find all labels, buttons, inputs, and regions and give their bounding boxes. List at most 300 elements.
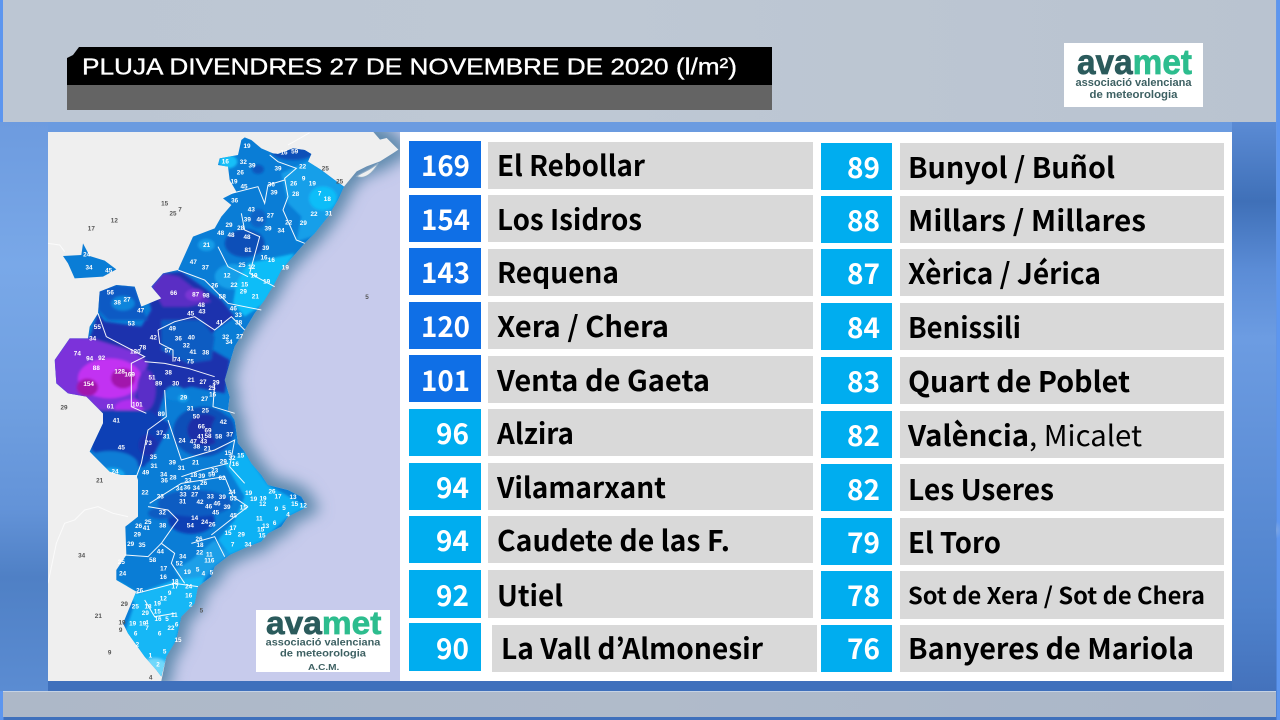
logo: avamet header: de meteorologia xyxy=(1090,89,1178,101)
map station values: 45 xyxy=(240,184,248,191)
map station values: 48 xyxy=(227,232,235,239)
map station values: 43 xyxy=(248,206,255,213)
map station values: 58 xyxy=(149,557,157,564)
map station values: 19 xyxy=(282,264,289,271)
map station values: 29 xyxy=(212,380,220,387)
map station values: 34 xyxy=(193,485,200,492)
map station values: 73 xyxy=(145,440,152,447)
map station values: 59 xyxy=(291,149,299,156)
map station values: 169 xyxy=(124,372,135,379)
map station values: 27 xyxy=(236,334,244,341)
map station values: 16 xyxy=(185,592,193,599)
row: 89 Bunyol / Buñol: Bunyol / Buñol xyxy=(908,146,1115,187)
map station values: 24 xyxy=(178,437,186,444)
map station values: 38 xyxy=(165,370,172,377)
map station values: 116 xyxy=(204,558,215,565)
row: 94 Vilamarxant: Vilamarxant xyxy=(496,466,666,507)
row: 83 Quart de Poblet: Quart de Poblet xyxy=(908,360,1130,401)
row: 87 Xèrica / Jérica xyxy=(821,249,1224,296)
map values outside region: 5 xyxy=(365,294,369,301)
map station values: 37 xyxy=(156,430,164,437)
map station values: 40 xyxy=(188,334,195,341)
map station values: 24 xyxy=(201,519,209,526)
map station values: 39 xyxy=(244,216,251,223)
white content panel xyxy=(48,132,1232,681)
row: 154 Los Isidros: 154 xyxy=(421,198,470,239)
row: 82 València, Micalet: València, Micalet xyxy=(907,414,1142,455)
map station values: 66 xyxy=(170,290,178,297)
row: 82 València, Micalet xyxy=(821,411,1224,458)
map station values: 26 xyxy=(211,282,219,289)
map station values: 19 xyxy=(184,569,191,576)
row: 88 Millars / Millares xyxy=(821,196,1224,243)
row: 120 Xera / Chera: 120 xyxy=(421,305,470,346)
row: 94 Caudete de las F.: 94 xyxy=(436,519,469,560)
map station values: 31 xyxy=(179,498,187,505)
map station values: 29 xyxy=(238,532,245,539)
region rainfall colours xyxy=(54,138,344,676)
map station values: 27 xyxy=(191,492,199,499)
map station values: 12 xyxy=(223,272,231,279)
logo: avamet header: avamet xyxy=(1077,43,1192,82)
row: 90 La Vall d'Almonesir xyxy=(409,623,817,672)
row: 79 El Toro: El Toro xyxy=(908,521,1001,562)
map station values: 32 xyxy=(240,159,247,166)
map station values: 6 xyxy=(134,630,138,637)
map station values: 15 xyxy=(240,504,247,511)
map station values: 11 xyxy=(256,516,263,523)
map station values: 18 xyxy=(190,472,198,479)
map station values: 41 xyxy=(113,418,120,425)
map station values: 26 xyxy=(136,587,144,594)
map station values: 5 xyxy=(210,569,214,576)
map station values: 34 xyxy=(85,264,93,271)
map station values: 46 xyxy=(256,217,264,224)
map station values: 18 xyxy=(171,579,179,586)
map values outside region xyxy=(60,166,369,681)
map station values: 16 xyxy=(154,616,162,623)
map station values: 58 xyxy=(219,293,226,300)
map station values: 98 xyxy=(202,293,210,300)
map station values: 28 xyxy=(292,191,300,198)
map station values: 34 xyxy=(89,335,97,342)
map station values: 7 xyxy=(231,542,235,549)
map station values: 4 xyxy=(286,512,290,519)
map station values: 31 xyxy=(150,463,158,470)
map station values: 48 xyxy=(198,302,205,309)
map station values: 28 xyxy=(169,474,177,481)
map station values: 38 xyxy=(159,522,167,529)
row: 94 Vilamarxant xyxy=(409,463,813,510)
map station values: 24 xyxy=(111,469,119,476)
map station values: 2 xyxy=(156,662,160,669)
map station values: 31 xyxy=(178,465,185,472)
map station values: 18 xyxy=(324,196,331,203)
row: 96 Alzira xyxy=(409,409,813,456)
row: 76 Banyeres de Mariola: Banyeres de Mariola xyxy=(908,627,1194,668)
row: 101 Venta de Gaeta xyxy=(409,355,813,403)
map station values: 45 xyxy=(187,311,195,318)
map station values: 18 xyxy=(144,604,152,611)
map station values: 7 xyxy=(318,191,322,198)
map station values: 47 xyxy=(137,308,145,315)
map station values: 22 xyxy=(167,625,175,632)
map station values: 26 xyxy=(268,488,276,495)
map station values: 25 xyxy=(238,262,246,269)
map station values: 15 xyxy=(257,527,265,534)
map logo: avamet A.C.M.: de meteorologia xyxy=(280,649,366,660)
map station values: 58 xyxy=(215,433,223,440)
map station values: 19 xyxy=(230,178,238,185)
row: 101 Venta de Gaeta: 101 xyxy=(421,359,470,400)
map station values: 34 xyxy=(244,542,252,549)
row: 76 Banyeres de Mariola: 76 xyxy=(847,627,880,668)
row: 84 Benissili xyxy=(821,303,1224,350)
map station values: 45 xyxy=(212,510,220,517)
map station values: 27 xyxy=(123,296,131,303)
map station values: 81 xyxy=(244,247,252,254)
row: 94 Caudete de las F. xyxy=(409,516,813,563)
map station values: 57 xyxy=(164,347,172,354)
map station values: 69 xyxy=(204,428,212,435)
row: 82 València, Micalet: 82 xyxy=(847,414,880,455)
map values outside region: 25 xyxy=(322,166,329,173)
map station values: 16 xyxy=(268,257,275,264)
row: 96 Alzira: 96 xyxy=(436,412,469,453)
map station values: 32 xyxy=(159,509,166,516)
logo: avamet header xyxy=(1064,43,1203,107)
map station values: 27 xyxy=(199,379,207,386)
row: 90 La Vall d'Almonesir: 90 xyxy=(436,627,469,668)
map station values: 47 xyxy=(190,259,197,266)
map station values: 34 xyxy=(179,553,187,560)
map station values: 22 xyxy=(196,549,204,556)
map station values: 17 xyxy=(274,493,282,500)
map station values: 26 xyxy=(237,170,244,177)
row: 88 Millars / Millares: 88 xyxy=(847,199,880,240)
map station values: 4 xyxy=(145,619,149,626)
enclave rainfall area xyxy=(63,243,116,278)
map values outside region: 29 xyxy=(60,404,68,411)
map station values: 21 xyxy=(252,294,259,301)
map station values: 45 xyxy=(230,513,237,520)
map station values: 19 xyxy=(309,180,316,187)
map station values: 43 xyxy=(200,438,208,445)
map station values: 16 xyxy=(222,159,229,166)
map station values: 51 xyxy=(148,374,156,381)
map station values: 19 xyxy=(250,496,258,503)
map station values: 27 xyxy=(267,212,274,219)
map station values: 39 xyxy=(270,190,278,197)
map values outside region: 9 xyxy=(119,627,123,634)
map station values: 41 xyxy=(189,349,197,356)
map station values: 39 xyxy=(264,226,272,233)
map station values: 45 xyxy=(105,267,113,274)
map station values: 21 xyxy=(187,377,195,384)
map station values: 34 xyxy=(225,339,233,346)
map station values: 75 xyxy=(187,359,194,366)
map station values: 25 xyxy=(144,519,152,526)
row: 82 Les Useres: 82 xyxy=(847,468,880,509)
map station values: 5 xyxy=(163,649,167,656)
map station values: 46 xyxy=(213,500,221,507)
map station values: 19 xyxy=(263,278,271,285)
map station values: 88 xyxy=(93,365,100,372)
map station values: 37 xyxy=(202,265,209,272)
map station values: 128 xyxy=(114,368,125,375)
map station values: 29 xyxy=(127,541,135,548)
map station values: 89 xyxy=(158,411,165,418)
map station values: 33 xyxy=(235,312,242,319)
map station values: 32 xyxy=(183,342,190,349)
map values outside region: 12 xyxy=(111,218,118,225)
map station values: 19 xyxy=(243,143,251,150)
map station values: 16 xyxy=(260,254,268,261)
row: 94 Vilamarxant: 94 xyxy=(436,466,469,507)
map station values: 19 xyxy=(245,490,253,497)
row: 101 Venta de Gaeta: Venta de Gaeta xyxy=(496,359,710,400)
map station values: 12 xyxy=(259,501,267,508)
map station values: 59 xyxy=(208,472,216,479)
row: 143 Requena: Requena xyxy=(497,251,619,292)
map station values: 31 xyxy=(325,210,333,217)
map station values: 12 xyxy=(160,596,167,603)
map station values: 32 xyxy=(228,455,236,462)
map station values: 5 xyxy=(196,567,200,574)
map station values: 21 xyxy=(204,446,211,453)
map station values: 24 xyxy=(228,489,236,496)
row: 143 Requena xyxy=(409,248,813,296)
map station values: 17 xyxy=(229,525,237,532)
row: 120 Xera / Chera: Xera / Chera xyxy=(497,305,669,346)
map station values: 16 xyxy=(232,461,239,468)
map station values: 46 xyxy=(205,504,213,511)
map station values: 22 xyxy=(141,490,149,497)
map station values: 11 xyxy=(171,612,178,619)
map station values: 42 xyxy=(150,334,157,341)
map station values: 15 xyxy=(154,609,161,616)
map station values: 1 xyxy=(149,653,153,660)
map station values: 16 xyxy=(280,150,288,157)
map station values: 19 xyxy=(259,496,267,503)
map values outside region: 34 xyxy=(78,553,86,560)
row: 143 Requena: 143 xyxy=(421,251,470,292)
row: 89 Bunyol / Buñol: 89 xyxy=(847,146,880,187)
map station values: 19 xyxy=(129,620,137,627)
row: 83 Quart de Poblet: 83 xyxy=(847,360,880,401)
map station values: 39 xyxy=(219,494,226,501)
map station values: 15 xyxy=(224,530,232,537)
map station values: 9 xyxy=(275,506,279,513)
map values outside region: 21 xyxy=(96,478,104,485)
map station values: 62 xyxy=(218,475,226,482)
map station values: 13 xyxy=(289,494,297,501)
map station values: 78 xyxy=(139,344,147,351)
map station values: 120 xyxy=(130,349,141,356)
map station values: 36 xyxy=(268,182,275,189)
map station values: 44 xyxy=(157,548,164,555)
map station values: 19 xyxy=(139,620,147,627)
map station values: 22 xyxy=(310,211,318,218)
map station values: 19 xyxy=(154,601,161,608)
map station values: 15 xyxy=(224,450,232,457)
map values outside region: 25 xyxy=(169,211,177,218)
map station values: 31 xyxy=(163,433,170,440)
map station values: 15 xyxy=(258,532,266,539)
row: 88 Millars / Millares: Millars / Millares xyxy=(908,199,1146,240)
map station values: 33 xyxy=(179,492,187,499)
row: 154 Los Isidros xyxy=(409,195,813,242)
land spit: Ebre delta xyxy=(357,163,378,177)
comarca borders xyxy=(98,155,305,617)
map station values: 6 xyxy=(175,622,179,629)
row: 169 El Rebollar: El Rebollar xyxy=(497,144,646,185)
map station values: 28 xyxy=(237,225,245,232)
map station values: 15 xyxy=(237,453,245,460)
map station values: 36 xyxy=(183,484,191,491)
top band xyxy=(3,0,1276,122)
map station values: 35 xyxy=(138,542,146,549)
map values outside region: 21 xyxy=(95,613,102,620)
map station values: 25 xyxy=(132,604,139,611)
map station values: 39 xyxy=(169,459,176,466)
map station values: 74 xyxy=(74,351,81,358)
map station values: 21 xyxy=(192,459,200,466)
map station values: 14 xyxy=(191,515,199,522)
map station values: 92 xyxy=(98,355,106,362)
map logo: avamet A.C.M.: A.C.M. xyxy=(308,662,339,672)
map station values: 26 xyxy=(200,480,208,487)
row: 92 Utiel xyxy=(409,570,813,618)
map station values: 34 xyxy=(176,486,183,493)
map station values: 15 xyxy=(291,501,299,508)
map station values: 89 xyxy=(155,381,163,388)
map station values: 34 xyxy=(160,472,168,479)
map values outside region: 17 xyxy=(88,225,95,232)
map values outside region: 29 xyxy=(121,601,128,608)
row: 79 El Toro xyxy=(821,518,1224,565)
row: 96 Alzira: Alzira xyxy=(496,412,574,453)
map station values: 9 xyxy=(302,176,306,183)
title banner: PLUJA DIVENDRES 27 DE NOVEMBRE DE 2020 (l/m²) xyxy=(82,54,737,80)
map values outside region: 5 xyxy=(200,608,204,615)
map station values: 53 xyxy=(128,321,135,328)
map station values: 36 xyxy=(231,198,239,205)
map station values: 94 xyxy=(86,355,94,362)
row: 76 Banyeres de Mariola xyxy=(821,625,1224,672)
map values outside region: 15 xyxy=(161,200,169,207)
map station values: 58 xyxy=(204,433,212,440)
map values outside region: 7 xyxy=(178,207,182,214)
logo: avamet header: associació valenciana xyxy=(1076,77,1192,89)
map station values: 34 xyxy=(277,228,285,235)
map station values: 87 xyxy=(192,292,200,299)
row: 79 El Toro: 79 xyxy=(847,521,880,562)
map station values: 24 xyxy=(185,584,193,591)
row: 120 Xera / Chera xyxy=(409,302,813,349)
row: 92 Utiel: 92 xyxy=(436,574,469,615)
map station values: 49 xyxy=(169,325,176,332)
row: 84 Benissili: 84 xyxy=(847,306,880,347)
map station values: 36 xyxy=(175,336,182,343)
map station values: 29 xyxy=(142,610,149,617)
map station values: 29 xyxy=(240,289,247,296)
map logo: avamet A.C.M.: avamet xyxy=(266,605,382,641)
map station values: 74 xyxy=(173,357,181,364)
map station values: 26 xyxy=(208,522,216,529)
row: 90 La Vall d'Almonesir: La Vall d’Almonesir xyxy=(501,627,764,668)
title banner xyxy=(67,47,772,110)
map station values: 101 xyxy=(132,401,143,408)
row: 169 El Rebollar xyxy=(409,141,813,189)
map station values: 38 xyxy=(193,443,201,450)
map station values: 25 xyxy=(208,385,216,392)
map station values: 41 xyxy=(197,434,205,441)
row: 82 Les Useres: Les Useres xyxy=(908,468,1054,509)
map station values: 48 xyxy=(243,234,251,241)
map station values: 30 xyxy=(172,380,180,387)
map station values: 7 xyxy=(145,625,149,632)
map station values: 46 xyxy=(230,305,237,312)
map station values: 24 xyxy=(83,252,91,259)
map values outside region: 19 xyxy=(118,619,126,626)
map station values: 2 xyxy=(136,641,140,648)
map station values: 12 xyxy=(300,503,307,510)
map station values: 29 xyxy=(300,220,307,227)
map station values: 33 xyxy=(157,494,164,501)
map station values: 39 xyxy=(198,473,206,480)
map station values: 19 xyxy=(250,272,258,279)
map station values: 42 xyxy=(220,419,227,426)
map station values: 29 xyxy=(225,222,233,229)
land xyxy=(48,130,398,681)
map station values: 33 xyxy=(207,494,214,501)
row: 89 Bunyol / Buñol xyxy=(821,143,1224,190)
map station values: 52 xyxy=(176,560,183,567)
sea background xyxy=(48,130,400,681)
map station values: 26 xyxy=(135,523,143,530)
map station values: 23 xyxy=(211,467,219,474)
map station values: 5 xyxy=(165,616,169,623)
row: 84 Benissili: Benissili xyxy=(908,306,1021,347)
map station values: 29 xyxy=(220,458,227,465)
map station values: 39 xyxy=(223,504,231,511)
map station values: 31 xyxy=(187,406,194,413)
map station values: 22 xyxy=(299,164,307,171)
map station values: 39 xyxy=(248,162,256,169)
map station values: 42 xyxy=(196,499,204,506)
map station values: 29 xyxy=(134,531,141,538)
map station values: 26 xyxy=(290,180,298,187)
map station values: 24 xyxy=(119,570,127,577)
row: 78 Sot de Xera / Sot de Chera: Sot de Xera / Sot de Chera xyxy=(908,577,1205,611)
map station values: 29 xyxy=(180,395,188,402)
row: 94 Caudete de las F.: Caudete de las F. xyxy=(497,519,730,560)
map station values: 32 xyxy=(222,334,230,341)
map station values: 4 xyxy=(202,571,206,578)
map logo: avamet A.C.M.: associació valenciana xyxy=(266,637,381,648)
sky right strip xyxy=(1232,122,1276,691)
map station values: 45 xyxy=(118,444,125,451)
map station values: 36 xyxy=(161,478,168,485)
map station values: 18 xyxy=(196,542,204,549)
row: 83 Quart de Poblet xyxy=(821,357,1224,404)
map station values xyxy=(74,143,333,669)
map station values: 39 xyxy=(262,245,270,252)
map values outside region: 9 xyxy=(108,650,112,657)
map station values: 55 xyxy=(94,324,101,331)
map station values: 16 xyxy=(209,392,217,399)
